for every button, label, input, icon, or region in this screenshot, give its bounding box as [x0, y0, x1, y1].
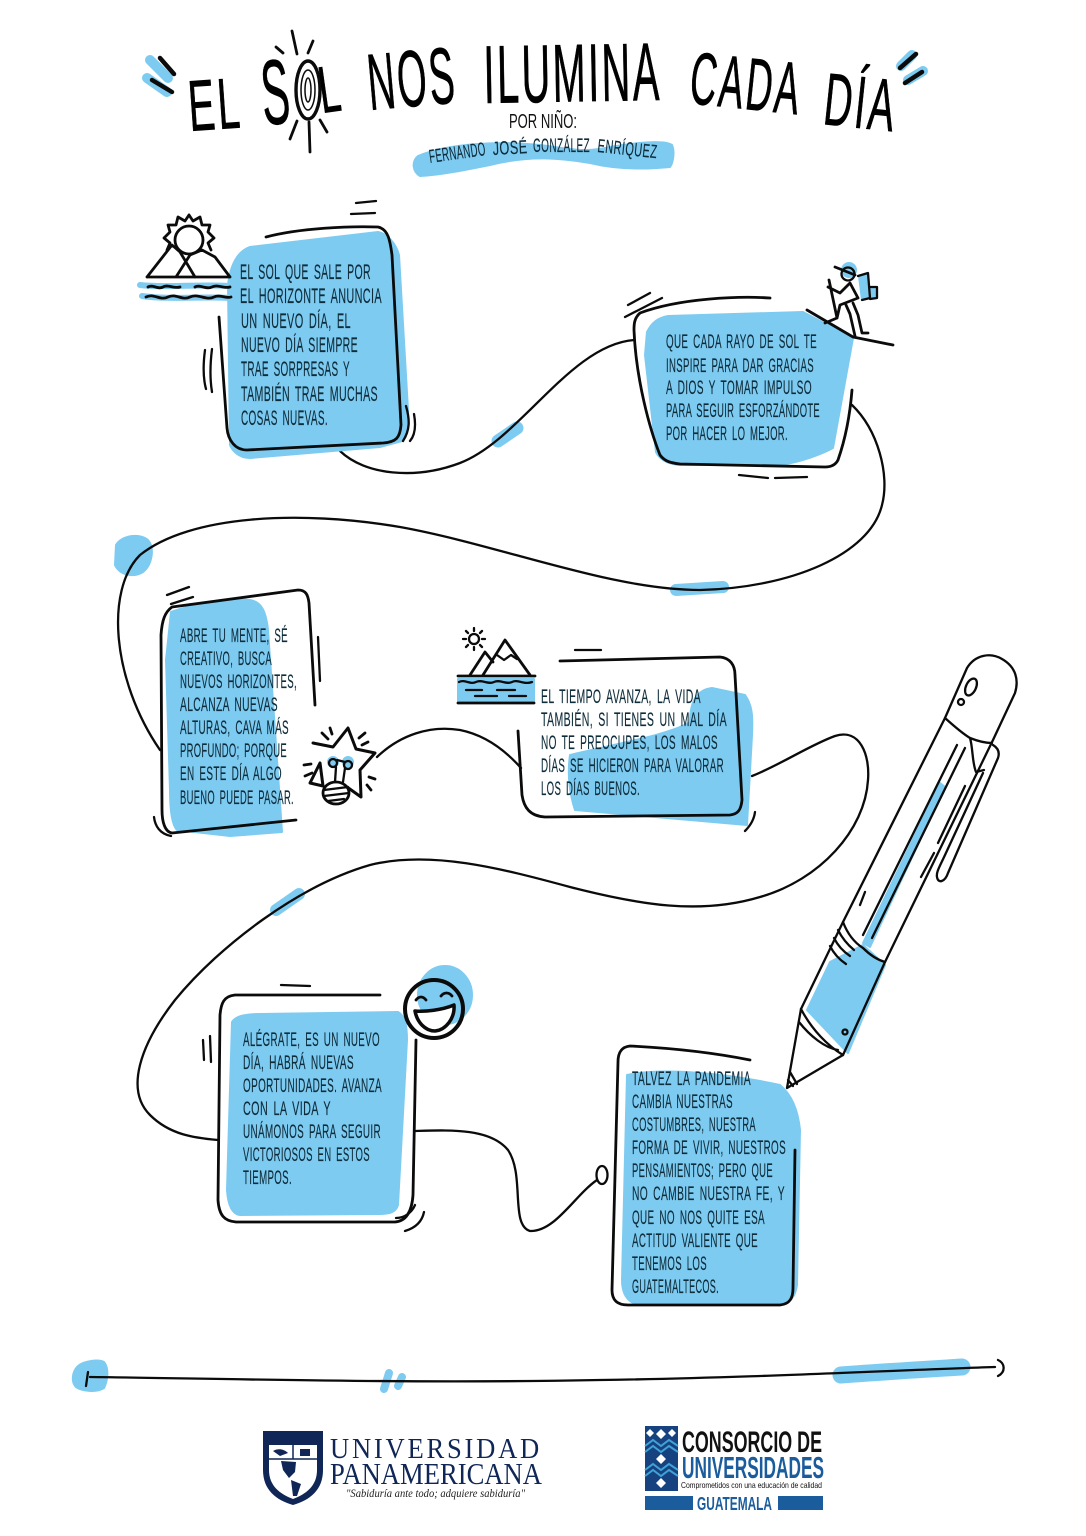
icon: sun over mountains: [140, 215, 231, 298]
card text: FORMA DE VIVIR, NUESTROS: [632, 1137, 786, 1159]
panel: sunrise: [140, 201, 415, 458]
author byline: FERNANDO: [428, 139, 487, 168]
title: L: [314, 51, 345, 127]
logo: Consorcio de Universidades: CONSORCIO DE: [682, 1426, 822, 1459]
card text: PENSAMIENTOS; PERO QUE: [632, 1160, 773, 1182]
card text: NO TE PREOCUPES, LOS MALOS: [541, 732, 718, 754]
panel: rejoice: [203, 966, 472, 1231]
right quote marks: [900, 54, 923, 83]
card text: NUEVO DÍA SIEMPRE: [241, 334, 358, 357]
card text: DÍA, HABRÁ NUEVAS: [243, 1051, 354, 1074]
card text: ABRE TU MENTE, SÉ: [180, 624, 288, 647]
connector line path: [115, 340, 884, 1231]
card text: TALVEZ LA PANDEMIA: [632, 1068, 751, 1090]
icon: laughing face: [405, 980, 463, 1038]
title: S: [257, 41, 294, 145]
title: DÍA: [820, 57, 902, 148]
woven pattern: [645, 1426, 678, 1491]
card text: [632, 1068, 786, 1298]
card text: COSTUMBRES, NUESTRA: [632, 1114, 756, 1136]
card text: TRAE SORPRESAS Y: [241, 358, 350, 381]
icon: blue smile blob: [418, 966, 472, 1024]
card text: PROFUNDO; PORQUE: [180, 740, 287, 762]
card text: A DIOS Y TOMAR IMPULSO: [666, 377, 812, 399]
card text: CAMBIA NUESTRAS: [632, 1091, 733, 1113]
card text: NO CAMBIE NUESTRA FE, Y: [632, 1183, 785, 1205]
title: [147, 27, 923, 152]
logo: Consorcio de Universidades: GUATEMALA: [697, 1494, 772, 1514]
card text: TIEMPOS.: [243, 1167, 292, 1189]
author byline: ENRÍQUEZ: [596, 136, 658, 163]
card text: UNÁMONOS PARA SEGUIR: [243, 1120, 381, 1143]
icon: star light bulb: [304, 728, 375, 804]
card text: DÍAS SE HICIERON PARA VALORAR: [541, 754, 724, 777]
card text: ACTITUD VALIENTE QUE: [632, 1230, 758, 1252]
card text: TENEMOS LOS: [632, 1253, 707, 1275]
card text: OPORTUNIDADES. AVANZA: [243, 1075, 382, 1097]
card text: LOS DÍAS BUENOS.: [541, 777, 640, 800]
card text: TAMBIÉN, SI TIENES UN MAL DÍA: [541, 708, 727, 731]
card text: INSPIRE PARA DAR GRACIAS: [666, 355, 814, 377]
card text: QUE NO NOS QUITE ESA: [632, 1207, 765, 1229]
card outline: [634, 297, 852, 467]
logo: Universidad Panamericana: [263, 1431, 543, 1505]
card text: EL SOL QUE SALE POR: [240, 261, 371, 284]
card text: ALCANZA NUEVAS: [180, 694, 278, 716]
blue name swash: [414, 142, 673, 176]
card text: POR HACER LO MEJOR.: [666, 423, 788, 445]
card outline: [219, 227, 401, 450]
card text: ALTURAS, CAVA MÁS: [180, 716, 289, 739]
logo: Consorcio de Universidades: [645, 1426, 824, 1514]
card text: VICTORIOSOS EN ESTOS: [243, 1144, 370, 1166]
card outline: [161, 590, 315, 833]
card text: GUATEMALTECOS.: [632, 1276, 719, 1298]
blue card: [228, 232, 408, 458]
title: NOS: [364, 31, 460, 127]
blue card: [622, 1072, 800, 1305]
panel: gratitude: [625, 263, 893, 478]
card text: CON LA VIDA Y: [243, 1098, 331, 1120]
shield: [263, 1431, 323, 1505]
footer line: [73, 1360, 1004, 1391]
card text: [240, 261, 382, 430]
panel: gratitude: PARA SEGUIR ESFORZÁNDOTE: [666, 399, 820, 422]
left quote marks: [147, 58, 174, 92]
title: EL: [186, 63, 245, 147]
blue card: [569, 688, 752, 825]
author byline: GONZÁLEZ: [533, 136, 590, 157]
card text: TAMBIÉN TRAE MUCHAS: [241, 383, 378, 406]
card text: EL TIEMPO AVANZA, LA VIDA: [541, 686, 701, 708]
panel: pandemic: [612, 1046, 800, 1305]
blue pen grip: [807, 945, 885, 1053]
card text: QUE CADA RAYO DE SOL TE: [666, 331, 817, 353]
panel: open your mind: NUEVOS HORIZONTES,: [180, 671, 297, 693]
icon: mountains and sea: [458, 628, 535, 703]
card text: CREATIVO, BUSCA: [180, 648, 272, 670]
card text: [541, 686, 727, 800]
card text: EL HORIZONTE ANUNCIA: [240, 285, 382, 308]
blue card: [166, 600, 282, 836]
card text: EN ESTE DÍA ALGO: [180, 762, 282, 785]
logo: Universidad Panamericana: "Sabiduría ante todo; adquiere sabiduría": [346, 1486, 526, 1500]
logo: Universidad Panamericana: PANAMERICANA: [330, 1456, 543, 1491]
panel: open your mind: [154, 587, 375, 836]
card outline: [218, 995, 416, 1222]
panel: time moves on: [458, 628, 755, 831]
blue card: [227, 1012, 407, 1215]
logo: Universidad Panamericana: UNIVERSIDAD: [330, 1433, 542, 1465]
card text: COSAS NUEVAS.: [241, 407, 328, 430]
card text: [666, 331, 820, 445]
card text: [180, 624, 297, 809]
card text: UN NUEVO DÍA, EL: [241, 310, 351, 333]
author byline: JOSÉ: [492, 137, 528, 160]
card outline: [518, 657, 742, 817]
illustration: pen: [787, 655, 1017, 1088]
sun letter O: [276, 31, 327, 152]
logo: Consorcio de Universidades: UNIVERSIDADES: [682, 1450, 824, 1485]
logo: Consorcio de Universidades: Comprometidos con una educación de calidad: [681, 1480, 822, 1490]
card text: ALÉGRATE, ES UN NUEVO: [243, 1028, 380, 1051]
panel: open your mind: BUENO PUEDE PASAR.: [180, 787, 294, 809]
card text: [243, 1028, 382, 1189]
icon: hiker: [807, 263, 893, 345]
title: ILUMINA: [483, 27, 662, 121]
author byline: POR NIÑO:: [509, 109, 577, 133]
author byline: [414, 109, 673, 176]
blue card: [645, 312, 853, 465]
title: CADA: [686, 36, 806, 131]
card outline: [612, 1046, 795, 1305]
